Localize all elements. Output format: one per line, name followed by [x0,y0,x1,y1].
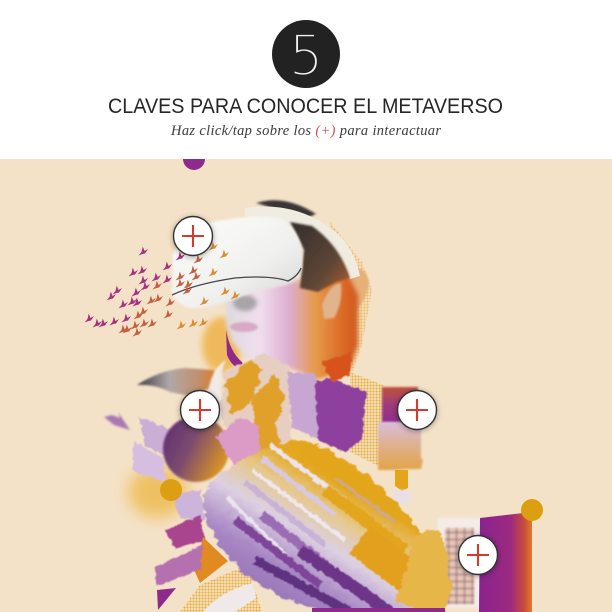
main swirl [203,440,442,612]
nose shadow [233,295,257,311]
ear [322,283,341,319]
triangle [157,588,176,610]
purple circle at top [183,159,205,170]
lilac under orb [172,490,205,520]
plus button: bird [180,390,220,430]
white laptop back [438,518,482,608]
face and neck [226,268,358,380]
orange glow behind face [202,317,242,373]
orange polygon [195,537,228,583]
yellow circle [160,479,182,501]
chest swirl [203,352,452,612]
white stub [393,490,410,503]
lips [230,322,258,332]
plus button: laptop [458,536,498,574]
splash over laptop [395,528,452,612]
right block: purple square and face [378,387,423,503]
lower leaves [165,515,205,548]
purple feathers [287,352,366,452]
purple chin shape [226,330,246,372]
halftone panels [180,372,387,612]
hair top [256,200,316,221]
purple square [382,387,418,423]
halftone fringe [330,222,372,372]
white and purple feather [132,441,166,482]
bottom right laptop [438,499,543,612]
brush strokes [228,445,425,612]
keyboard [445,528,474,604]
gradient block [378,422,423,470]
plus button: headset [174,216,212,256]
left feathers and orb [104,412,229,610]
pale chest base [220,352,292,470]
bird head [137,368,218,396]
yellow stub [395,470,408,491]
number badge [272,20,340,88]
header background [0,0,612,159]
yellow glow [128,466,188,518]
orange splash [225,358,285,485]
headset visor [172,217,302,308]
white swoosh [203,583,256,612]
lilac feathers [139,417,172,456]
plus button: block [398,390,436,430]
small leaf [104,412,130,430]
white curves [208,360,232,425]
hair [290,222,350,292]
title: CLAVES PARA CONOCER EL METAVERSO [108,95,503,118]
figure: woman with VR headset [172,200,372,380]
orb [163,416,229,482]
subtitle: Haz click/tap sobre los (+) para interactuar [170,123,441,139]
pale ear [345,269,369,310]
striped feather [155,545,203,586]
pink brush [216,417,262,475]
yellow circle [521,499,543,521]
flock of birds [84,242,240,336]
number badge: 5 [289,24,323,87]
purple panel [479,512,532,612]
illustration background [0,159,612,612]
visor seam [172,268,301,295]
bottom purple bar [312,608,445,612]
headset strap [245,207,360,279]
